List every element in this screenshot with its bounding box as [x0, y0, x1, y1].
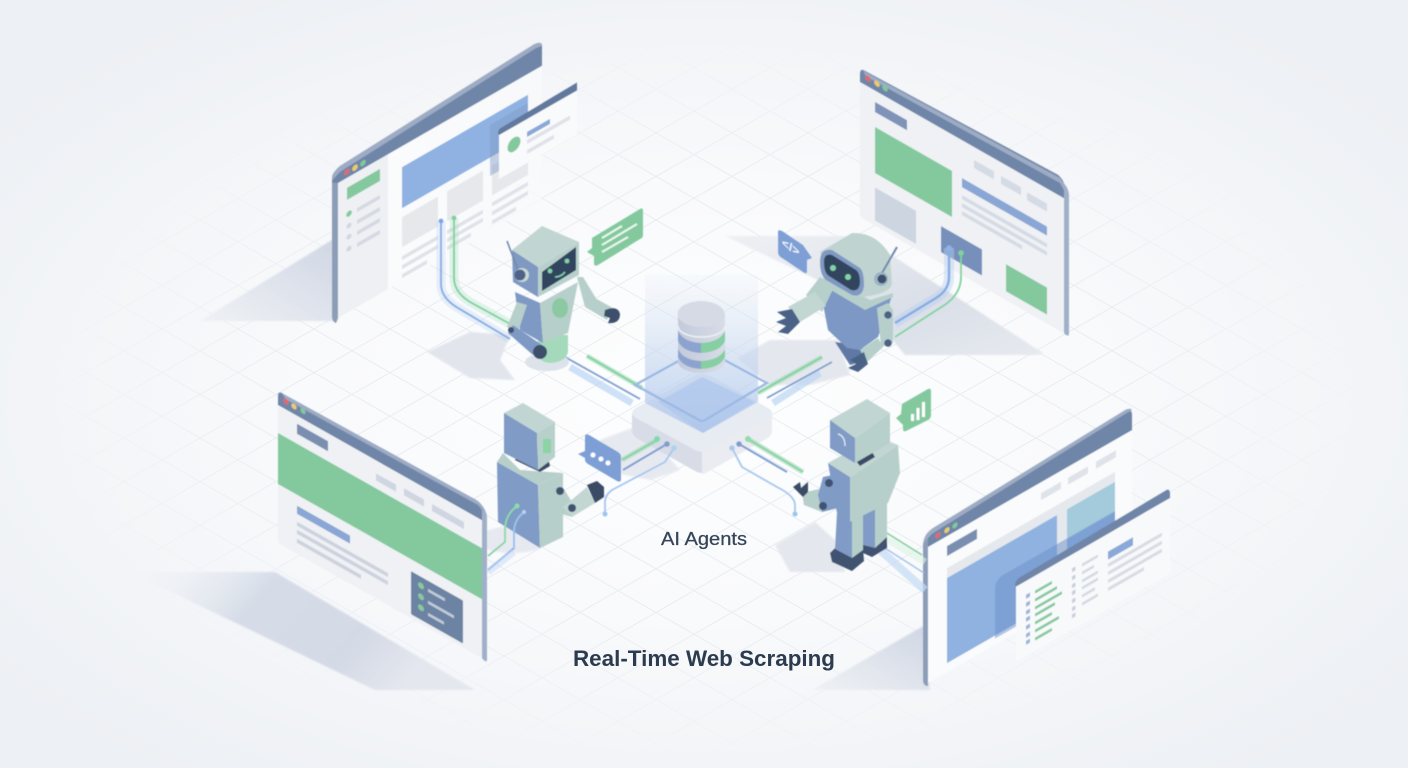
page body: [278, 405, 482, 658]
central hub platform: [632, 275, 772, 474]
content cards: [402, 145, 528, 247]
blue inner square: [658, 377, 755, 433]
article text lines: [297, 522, 388, 594]
popup text lines: [527, 108, 570, 154]
head: [820, 233, 897, 297]
article text lines: [962, 195, 1047, 264]
arm: [793, 473, 843, 512]
nav pills: [1041, 450, 1116, 500]
dark list box: [411, 571, 463, 644]
floor shadows: [130, 236, 1043, 690]
arm: [545, 478, 604, 517]
article heading: [297, 506, 350, 544]
popup body: [1016, 498, 1170, 662]
popup title bar: [1015, 488, 1170, 587]
torso: [497, 462, 540, 548]
infographic scene: [192, 42, 1215, 690]
popup card: bottom right: [1015, 488, 1170, 662]
torso: [819, 283, 893, 350]
popup body: [499, 91, 577, 179]
connector lines: robot 1 to hub: [565, 356, 642, 403]
title bar: [278, 388, 486, 523]
connector lines: robot 2 to top-right browser: [895, 245, 964, 337]
popup shadow overlay: [995, 511, 1115, 639]
feet: [830, 548, 864, 571]
text column: [1108, 521, 1162, 591]
neck: [856, 452, 875, 466]
torso: [828, 463, 850, 520]
blue main panel: [947, 515, 1057, 663]
green base: [538, 335, 568, 363]
label: AI Agents: AI Agents: [661, 529, 747, 549]
frame: [332, 175, 338, 325]
circuit traces: [505, 504, 526, 549]
popup title bar: [498, 83, 577, 136]
right arm: [577, 277, 620, 323]
gray block: [875, 188, 916, 244]
database cylinder icon: [678, 301, 725, 373]
translucent shadow of top left popup: [490, 103, 528, 176]
connector lines: bottom-left browser to robot 3: [488, 506, 524, 572]
title bar: [923, 406, 1132, 550]
logo block: [947, 529, 977, 556]
speech bubble: typing dots: [578, 434, 621, 482]
green hero: [875, 127, 952, 217]
head: [830, 399, 890, 463]
connector lines: robot 1 to top-left browser: [439, 216, 512, 339]
speech bubble: code: [778, 230, 812, 273]
speech bubble: text message: [587, 208, 643, 266]
right frame: [482, 506, 487, 662]
data source box: [941, 226, 982, 276]
pelvis: [835, 342, 868, 365]
connector lines: hub to robot 3: [602, 436, 677, 516]
popup card: top left: [498, 83, 577, 180]
title bar: [332, 40, 542, 186]
robot 4: bottom right: [793, 399, 900, 571]
teal side panel: [1067, 482, 1115, 584]
connector lines: robot 2 to hub: [758, 357, 832, 403]
logo block: [875, 102, 907, 130]
connector lines: robot 4 to bottom-right browser: [880, 530, 925, 590]
browser window: top right: [860, 62, 1069, 337]
list column one: [1026, 574, 1062, 646]
browser window: top left: [332, 40, 542, 325]
head: [504, 403, 555, 470]
page body: [860, 82, 1064, 333]
left frame: [923, 537, 928, 689]
torso: [515, 292, 543, 343]
robot 3: bottom left: [497, 403, 604, 549]
avatar: [508, 134, 520, 155]
outline ring: [635, 348, 767, 421]
head: [507, 226, 579, 297]
chest light: [552, 298, 568, 318]
browser window: bottom left: [278, 388, 487, 662]
connector lines: hub to robot 4: [729, 436, 803, 516]
code glyph: </>: [782, 235, 800, 259]
illustration: [130, 40, 1170, 690]
sidebar: [338, 154, 388, 318]
left arm: [776, 277, 835, 334]
content text lines: [402, 182, 528, 278]
page body: [928, 430, 1132, 683]
logo block: [297, 424, 328, 451]
title: Real-Time Web Scraping: Real-Time Web Scraping: [573, 646, 835, 671]
robot 1: top left: [507, 226, 620, 371]
list column two: [1072, 553, 1098, 618]
hero banner: [402, 95, 528, 208]
robot 2: top right: [776, 233, 897, 372]
article heading: [962, 178, 1047, 236]
green banner: [278, 433, 482, 599]
platform body: [632, 413, 772, 473]
neck: [515, 450, 550, 472]
left arm: [507, 302, 547, 359]
platform top: [632, 374, 772, 452]
right frame: [1064, 183, 1069, 337]
gray layout strip: [947, 472, 1115, 662]
browser window: bottom right: [923, 406, 1132, 689]
nav pills: [974, 160, 1047, 212]
nav pills: [376, 472, 464, 530]
page body: [338, 66, 542, 318]
legs: [835, 513, 852, 558]
speech bubble: bar chart: [896, 389, 931, 431]
green block: [1006, 264, 1047, 315]
title bar: [860, 62, 1064, 199]
right arm: [848, 303, 893, 372]
light column: [645, 275, 758, 433]
pedestal: [525, 353, 569, 371]
